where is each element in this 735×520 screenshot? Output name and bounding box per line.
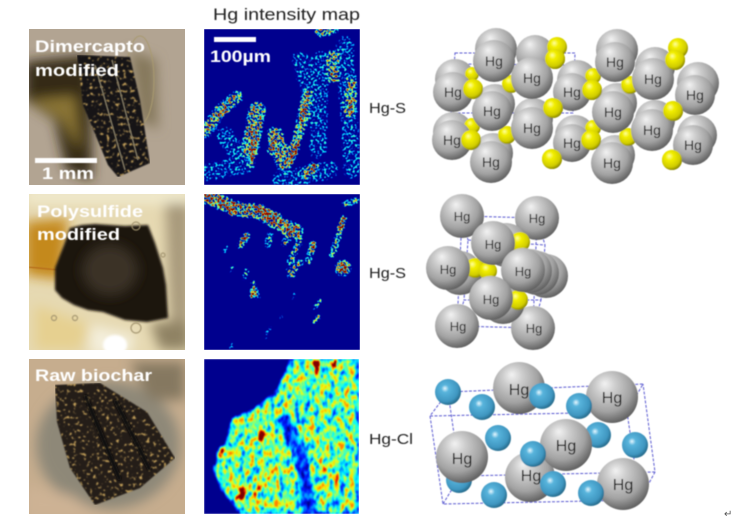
return mark glyph: ↵ xyxy=(724,509,732,520)
molecular model: Hg-S chain structure: Hg xyxy=(686,87,704,103)
scale bar: 1 mm xyxy=(35,158,97,183)
molecular model: Hg-S chain structure: Hg xyxy=(684,137,702,153)
molecular model: Hg-S chain structure: Hg xyxy=(643,122,661,138)
molecular model: Hg-S cubic structure: Hg xyxy=(529,211,545,226)
molecular model: Hg-S chain structure: Hg xyxy=(603,155,621,171)
panel: polysulfide modified photo xyxy=(29,194,185,350)
char surface sheen xyxy=(82,244,138,296)
molecular model: Hg-Cl structure: Hg xyxy=(556,438,576,455)
label: Polysulfide modified: modified xyxy=(37,225,120,244)
char particle xyxy=(77,55,150,177)
molecular model: Hg-S cubic structure: Hg xyxy=(485,237,501,252)
chart: Hg intensity map, polysulfide xyxy=(204,194,360,350)
molecular model: Hg-S chain structure: Hg xyxy=(483,103,501,119)
char particle xyxy=(55,383,175,505)
molecular model: Hg-S cubic structure xyxy=(426,194,568,350)
molecular model: Hg-S cubic structure: Hg xyxy=(483,292,499,307)
chart: Hg intensity map, raw biochar xyxy=(204,359,359,514)
compound label: Hg-S middle: Hg-S xyxy=(369,265,406,282)
molecular model: Hg-Cl structure: Hg xyxy=(509,382,529,399)
molecular model: Hg-S cubic structure: Hg xyxy=(526,321,542,336)
molecular model: Hg-S chain structure: Hg xyxy=(563,135,581,151)
molecular model: Hg-Cl structure: Hg xyxy=(613,477,633,494)
molecular model: Hg-S chain structure: Hg xyxy=(444,84,462,100)
molecular model: Hg-S chain structure: Hg xyxy=(485,53,503,69)
molecular model: Hg-S chain structure: Hg xyxy=(523,120,541,136)
label: Raw biochar: Raw biochar xyxy=(35,366,152,385)
label: Polysulfide modified: Polysulfide xyxy=(37,202,143,221)
molecular model: Hg-Cl structure: Hg xyxy=(452,451,472,468)
scale bar: 100 µm: 100µm xyxy=(210,47,271,66)
label: Dimercapto modified: modified xyxy=(35,61,119,80)
chart: Hg intensity map, dimercapto xyxy=(204,29,360,185)
compound label: Hg-S top: Hg-S xyxy=(369,100,406,117)
label: Dimercapto modified: Dimercapto xyxy=(35,37,145,56)
panel: dimercapto modified photo xyxy=(25,29,185,185)
molecular model: Hg-S cubic structure: Hg xyxy=(515,264,531,279)
molecular model: Hg-Cl structure: Hg xyxy=(602,390,622,407)
molecular model: Hg-Cl structure xyxy=(430,362,655,510)
panel: raw biochar photo xyxy=(25,359,185,520)
scale bar: 100 µm xyxy=(210,37,271,66)
molecular model: Hg-S chain structure: Hg xyxy=(563,84,581,100)
molecular model: Hg-S chain structure: Hg xyxy=(443,132,461,148)
molecular model: Hg-S chain structure: Hg xyxy=(644,71,662,87)
column heading: Hg intensity map: Hg intensity map xyxy=(213,5,360,24)
molecular model: Hg-S chain structure: Hg xyxy=(523,70,541,86)
molecular model: Hg-Cl structure: Hg xyxy=(521,468,541,485)
molecular model: Hg-S chain structure: Hg xyxy=(606,54,624,70)
char particle xyxy=(55,224,168,322)
molecular model: Hg-S chain structure: Hg xyxy=(604,104,622,120)
molecular model: Hg-S cubic structure: Hg xyxy=(454,209,470,224)
label: Dimercapto modified xyxy=(36,39,145,77)
molecular model: Hg-S cubic structure: Hg xyxy=(450,319,466,334)
molecular model: Hg-S chain structure xyxy=(432,28,719,184)
label: Polysulfide modified xyxy=(38,204,143,241)
glare highlight xyxy=(102,334,128,350)
air bubbles xyxy=(52,222,165,333)
molecular model: Hg-S cubic structure: Hg xyxy=(440,262,456,277)
compound label: Hg-Cl: Hg-Cl xyxy=(369,431,413,448)
molecular model: Hg-S chain structure: Hg xyxy=(482,154,500,170)
scale bar: 1 mm: 1 mm xyxy=(42,164,94,183)
